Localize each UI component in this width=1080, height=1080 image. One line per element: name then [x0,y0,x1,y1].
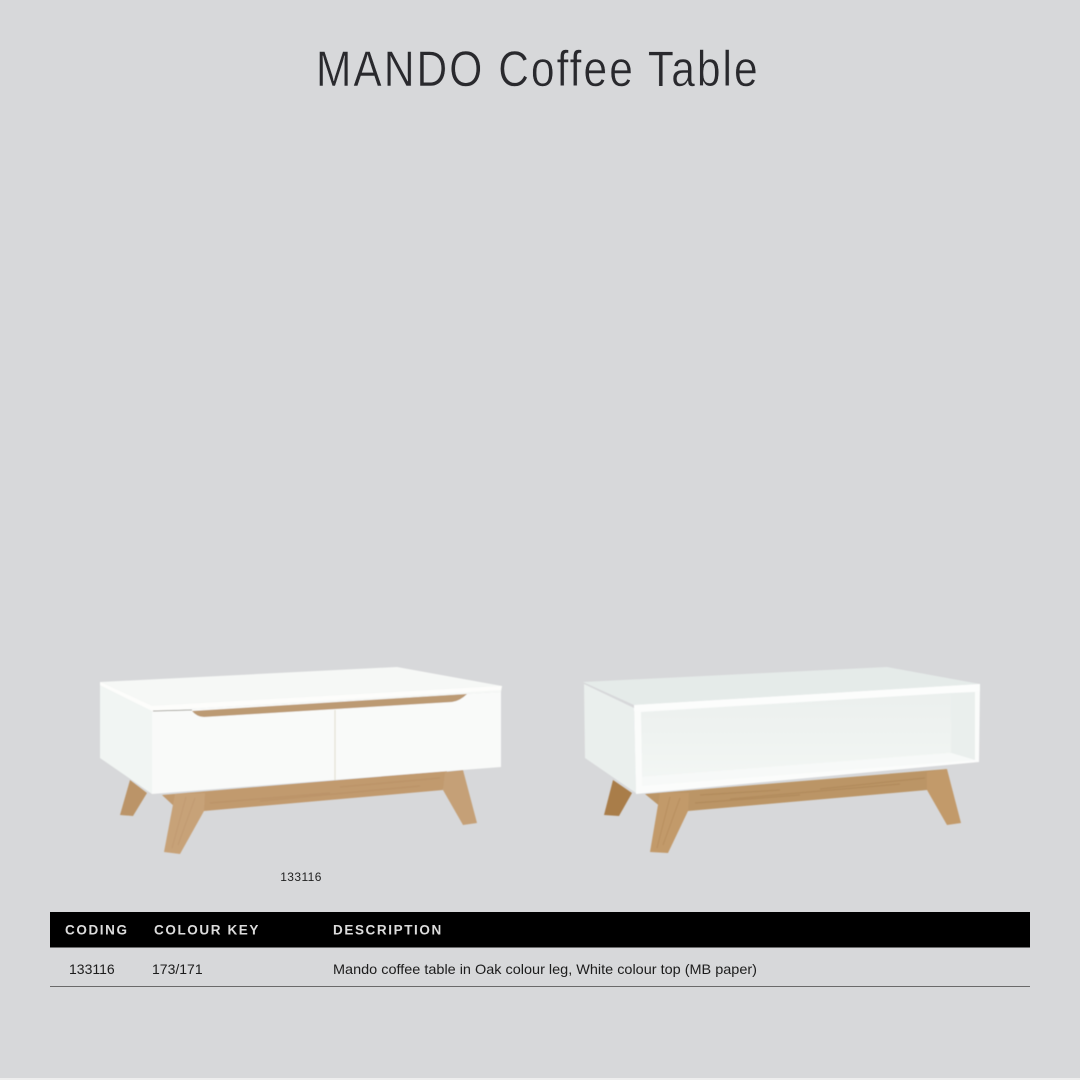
table top front lip [100,682,502,711]
cell: coding: 133116 [69,961,115,977]
right leg [443,770,477,825]
back left leg [604,780,632,816]
drawer fronts [152,692,501,794]
front left leg [650,793,689,853]
header: description: DESCRIPTION [333,922,443,938]
product code label: 133116 [280,870,322,884]
back wall of shelf [641,693,951,777]
table top front edge [634,684,980,711]
cell: colour key: 173/171 [152,961,203,977]
oak finger slot [192,694,467,717]
table top surface [583,667,980,705]
back left leg [120,780,147,816]
cell: description: Mando coffee table in Oak colour leg, White colour top (MB paper) [333,961,757,977]
oak rail [645,769,947,811]
front frame [634,684,980,794]
table header bar [50,912,1030,948]
leg grain [172,797,195,848]
coffee table with open shelf, rear view [583,667,980,853]
table row [50,961,1030,987]
shelf surface [642,753,975,786]
header: coding: CODING [65,922,129,938]
shadow line under top [153,710,192,711]
left side panel [100,684,152,794]
leg grain [657,797,680,848]
oak rail [162,771,447,811]
title: MANDO Coffee Table [316,41,760,97]
left side panel [584,684,636,793]
table top [100,667,502,711]
front left leg [164,793,205,854]
header: colour key: COLOUR KEY [154,922,260,938]
drawer gap [334,710,336,780]
right inner side [951,692,975,760]
rail grain [695,778,925,803]
rail grain [210,778,440,803]
right leg [927,769,961,825]
coffee table with drawers, front view [100,667,502,854]
